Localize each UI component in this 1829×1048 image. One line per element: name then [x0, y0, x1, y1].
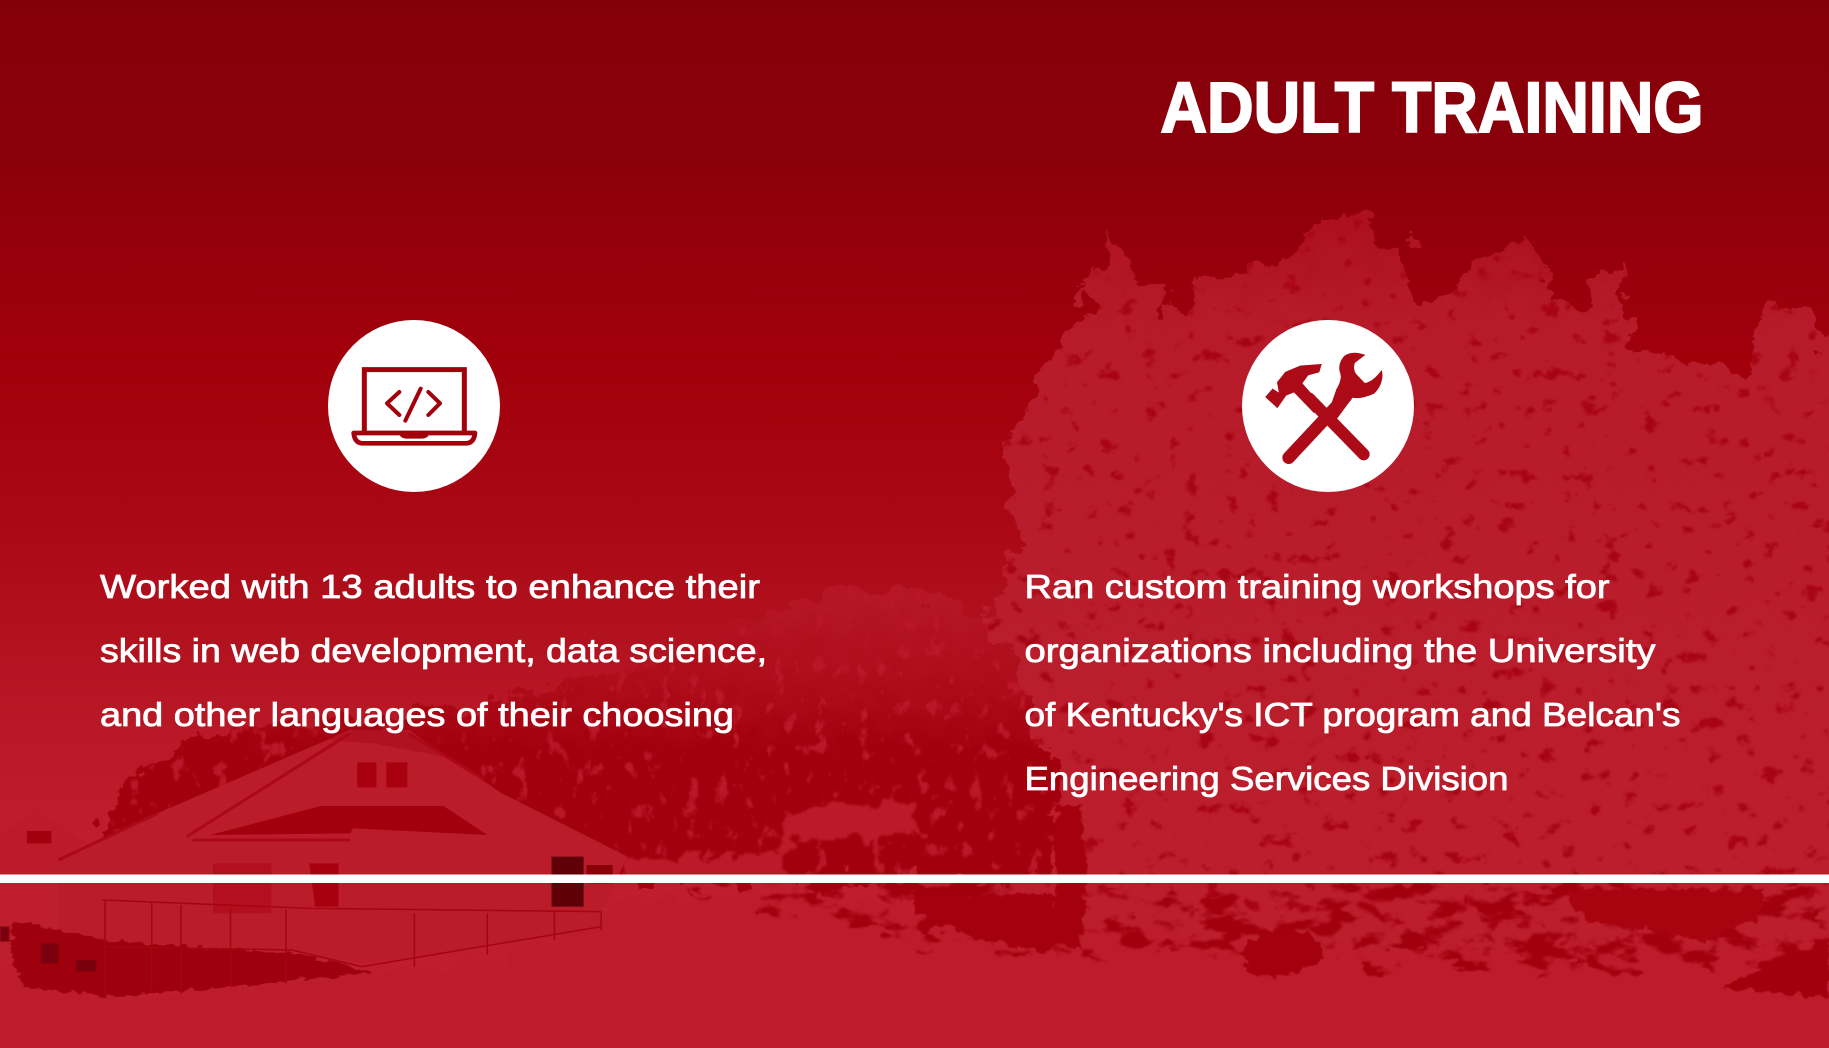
text block: custom workshops: of Kentucky's ICT program and Belcan's — [1024, 697, 1680, 734]
title: ADULT TRAINING — [1160, 69, 1704, 148]
screen — [364, 370, 464, 432]
fence posts — [1055, 806, 1087, 947]
gable shading — [327, 730, 444, 757]
text block: web development training: Worked with 13 adults to enhance their — [100, 569, 760, 606]
snow bank, mid right of house — [618, 803, 920, 880]
main house body — [58, 730, 627, 963]
text block: custom workshops: organizations including the University — [1024, 633, 1656, 670]
text block: web development training — [100, 569, 767, 734]
roof edges — [58, 733, 484, 860]
text block: web development training: and other languages of their choosing — [100, 697, 734, 734]
laptop icon circle — [328, 320, 500, 492]
house illustration — [0, 730, 627, 997]
tools glyph — [1266, 353, 1382, 458]
text block: custom workshops — [1024, 569, 1680, 798]
shadow mound centre — [1241, 927, 1323, 977]
code brackets and slash — [387, 389, 440, 421]
deck railing — [102, 900, 601, 997]
tools icon circle — [1242, 320, 1414, 492]
curved shadow right — [1565, 889, 1766, 941]
tree band behind the house — [100, 590, 1060, 880]
hammer head — [1266, 364, 1321, 413]
text block: web development training: skills in web development, data science, — [100, 633, 767, 670]
fallen branches — [915, 894, 1061, 955]
dark roof section — [210, 806, 487, 835]
wrench head — [1329, 353, 1382, 420]
dark doorway — [552, 857, 584, 907]
small neighbouring house — [0, 812, 85, 875]
mottled shadows below the divider — [700, 884, 1829, 975]
notch — [400, 434, 428, 438]
shadow wedge far right — [1719, 939, 1829, 997]
snow mid ground — [0, 895, 1829, 1048]
lower-right shadows — [915, 806, 1829, 997]
icon: crossed hammer and wrench — [1242, 320, 1414, 492]
laptop glyph — [354, 370, 475, 443]
ground floor windows — [309, 863, 338, 907]
text block: custom workshops: Ran custom training workshops for — [1024, 569, 1610, 606]
shadow beneath deck — [12, 920, 374, 997]
hammer handle — [1309, 398, 1364, 454]
text block: custom workshops: Engineering Services Division — [1024, 761, 1508, 798]
base — [354, 433, 475, 443]
wrench handle — [1289, 397, 1346, 458]
white divider band — [0, 874, 1829, 883]
attic window — [357, 762, 407, 787]
dark gaps under deck — [0, 927, 96, 972]
snowy tree silhouette, right — [960, 212, 1829, 960]
icon: laptop with code symbol — [328, 320, 500, 492]
